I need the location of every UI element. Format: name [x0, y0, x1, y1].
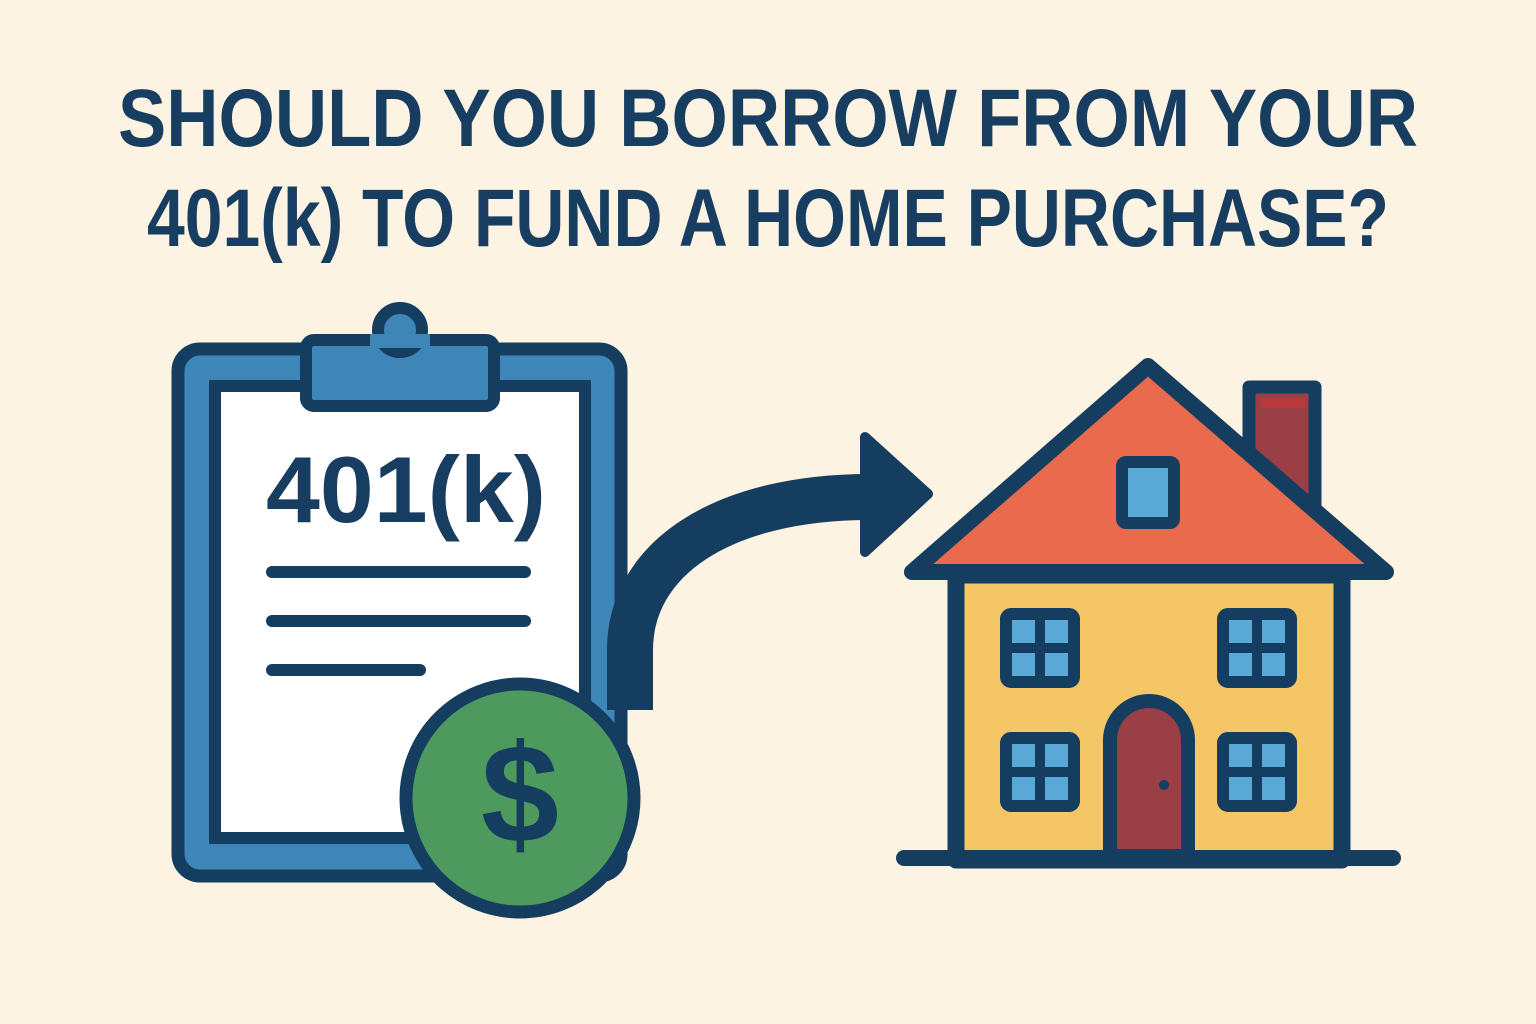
text lines — [272, 572, 525, 670]
dormer window — [1122, 462, 1174, 523]
ground — [904, 850, 1393, 866]
arrow — [630, 437, 928, 710]
icon: house — [904, 366, 1393, 860]
label: 401(k): 401(k) — [266, 437, 546, 542]
icon: dollar coin: $ — [481, 715, 559, 872]
title — [118, 73, 1418, 264]
windows — [1006, 614, 1291, 806]
door — [1110, 701, 1188, 856]
icon: dollar coin — [406, 684, 634, 912]
roof — [912, 366, 1386, 572]
chimney — [1249, 387, 1315, 517]
body — [956, 575, 1342, 860]
clip — [306, 308, 494, 406]
icon: clipboard — [178, 308, 621, 876]
